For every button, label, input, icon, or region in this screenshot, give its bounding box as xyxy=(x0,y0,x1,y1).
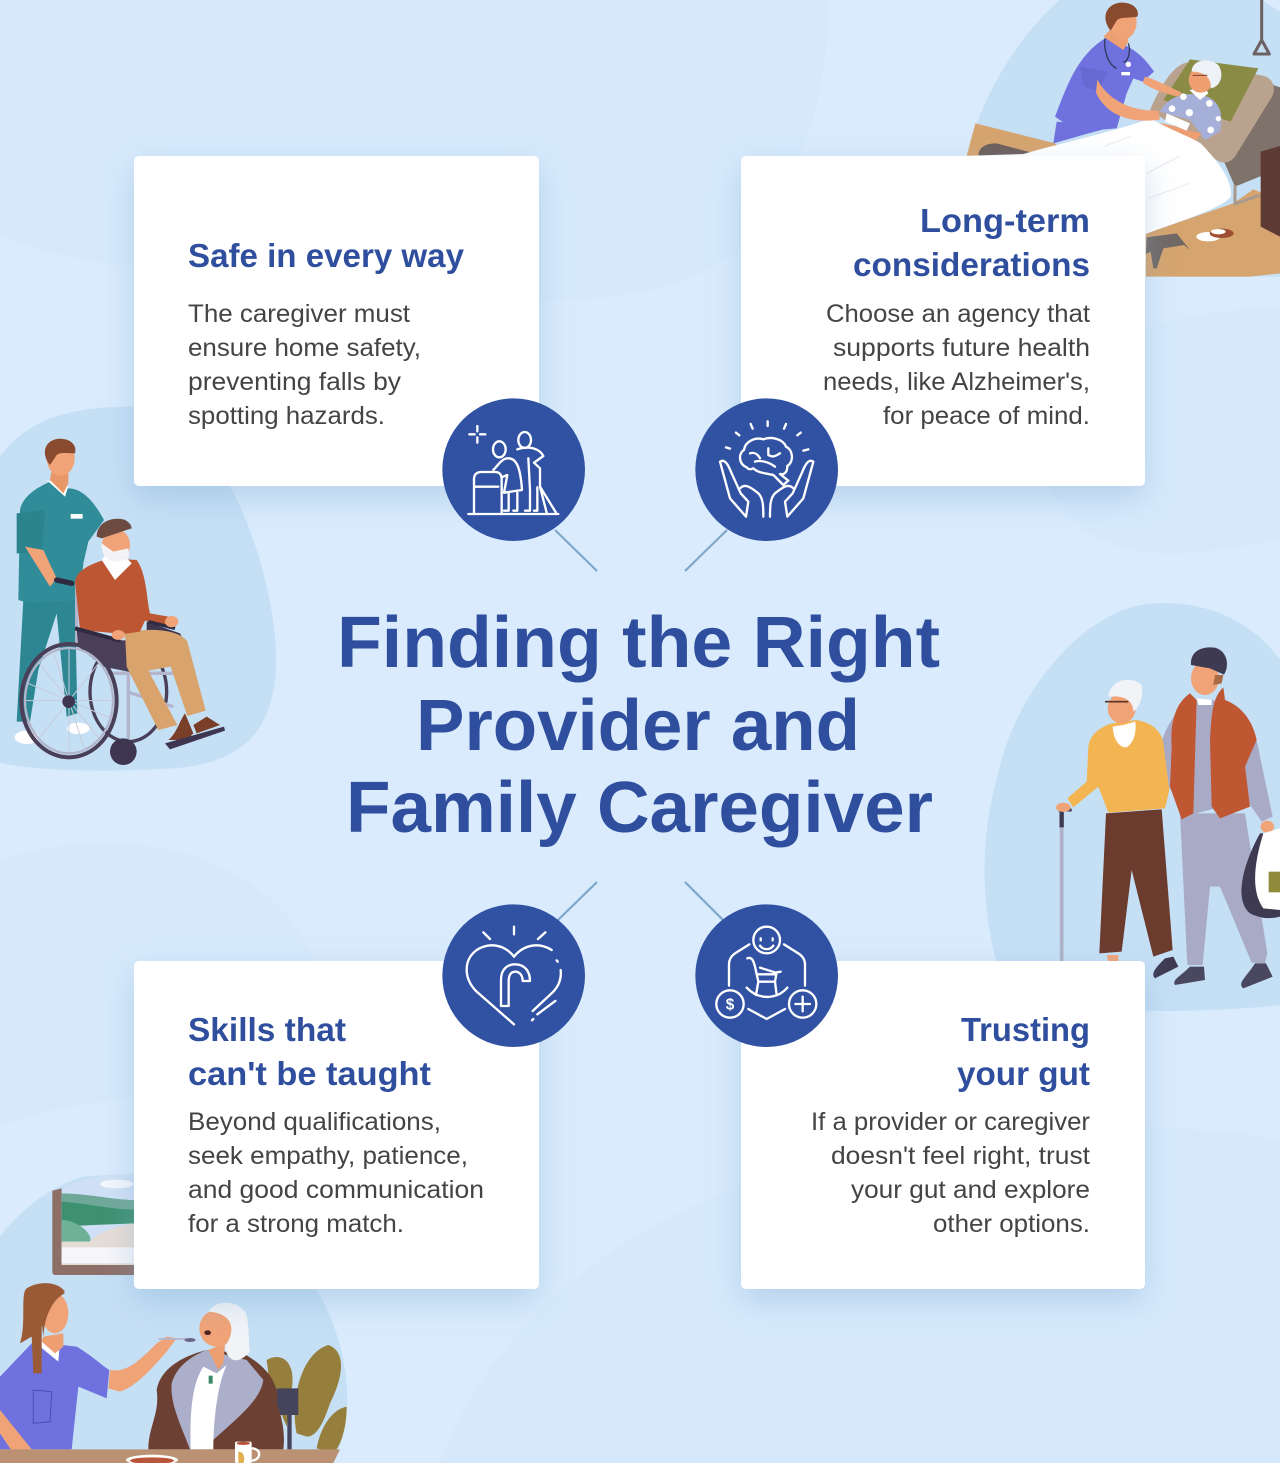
icon: person, rocking chair, money and health: $ xyxy=(726,996,735,1013)
heading: Trusting xyxy=(961,1011,1090,1048)
panel: trusting your gut xyxy=(741,961,1145,1289)
illustration: older woman and young man walking xyxy=(985,603,1280,1011)
sub: nurse xyxy=(15,439,104,744)
panel: skills that can't be taught xyxy=(134,961,539,1289)
sub: older woman xyxy=(148,1303,284,1449)
panel: safe in every way xyxy=(134,156,539,486)
heading: your gut xyxy=(957,1055,1090,1092)
heading: Safe in every way xyxy=(188,237,465,274)
icon: heart with cane xyxy=(442,904,585,1047)
sub: footstool xyxy=(1146,233,1190,268)
body text: The caregiver must xyxy=(188,300,410,328)
heading xyxy=(853,202,1090,283)
body text xyxy=(188,1108,484,1238)
body text: If a provider or caregiver xyxy=(811,1108,1090,1136)
title: Family Caregiver xyxy=(346,768,933,848)
sub: caster wheel xyxy=(110,738,137,765)
body text: supports future health xyxy=(833,334,1090,362)
icon: caregiver helping person with walker xyxy=(442,398,585,541)
body text: doesn't feel right, trust xyxy=(831,1142,1090,1170)
sub: spoon xyxy=(158,1336,187,1341)
body text: your gut and explore xyxy=(851,1176,1090,1204)
body text: Beyond qualifications, xyxy=(188,1108,441,1136)
sub: table xyxy=(0,1449,340,1463)
body text xyxy=(811,1108,1090,1238)
panel: long-term considerations xyxy=(741,156,1145,486)
illustration: nurse pushing man in wheelchair xyxy=(0,407,276,771)
heading xyxy=(188,1011,431,1092)
heading: can't be taught xyxy=(188,1055,431,1092)
body text: for peace of mind. xyxy=(883,402,1090,430)
sub: backrest xyxy=(1150,63,1274,163)
sub: bed sheet xyxy=(960,118,1231,277)
sub: large wheel xyxy=(21,644,117,757)
sub: pillow xyxy=(1163,59,1258,122)
sub: patient xyxy=(1153,60,1221,144)
body text xyxy=(188,300,421,430)
sub: older woman xyxy=(1056,680,1178,978)
heading xyxy=(957,1011,1090,1092)
body text: spotting hazards. xyxy=(188,402,385,430)
icon: brain held in hands xyxy=(695,398,838,541)
heading: Skills that xyxy=(188,1011,346,1048)
sub: wheelchair back wheel and frame xyxy=(57,580,173,743)
body text: other options. xyxy=(933,1210,1090,1238)
sub: bowl and mug xyxy=(126,1442,259,1463)
sub: slippers xyxy=(1196,229,1234,241)
heading: considerations xyxy=(853,246,1090,283)
body text: Choose an agency that xyxy=(826,300,1090,328)
title: Provider and xyxy=(416,686,860,766)
body text: ensure home safety, xyxy=(188,334,421,362)
sub: shopping bag xyxy=(1241,828,1280,918)
sub: chair xyxy=(277,1388,298,1449)
body text: preventing falls by xyxy=(188,368,402,396)
heading: Long-term xyxy=(920,202,1090,239)
sub: young man xyxy=(1158,647,1274,988)
sub: framed picture xyxy=(52,1174,135,1275)
sub: plant xyxy=(267,1345,347,1453)
sub: seated man xyxy=(75,519,225,749)
sub: pull handle xyxy=(1254,0,1269,54)
body text xyxy=(823,300,1090,430)
title xyxy=(337,603,940,848)
sub: bedside cabinet xyxy=(1261,146,1280,237)
icon: person, rocking chair, money and health xyxy=(695,904,838,1047)
body text: and good communication xyxy=(188,1176,484,1204)
body text: for a strong match. xyxy=(188,1210,404,1238)
title: Finding the Right xyxy=(337,603,940,683)
body text: needs, like Alzheimer's, xyxy=(823,368,1090,396)
sub: cane xyxy=(1058,810,1072,962)
illustration: caregiver feeding older woman xyxy=(0,1173,347,1463)
illustration: nurse at hospital bed xyxy=(960,0,1280,277)
sub: nurse xyxy=(1053,3,1182,143)
sub: caregiver xyxy=(0,1283,177,1463)
body text: seek empathy, patience, xyxy=(188,1142,468,1170)
sub: bed frame xyxy=(1223,83,1280,187)
connector lines xyxy=(555,530,727,920)
